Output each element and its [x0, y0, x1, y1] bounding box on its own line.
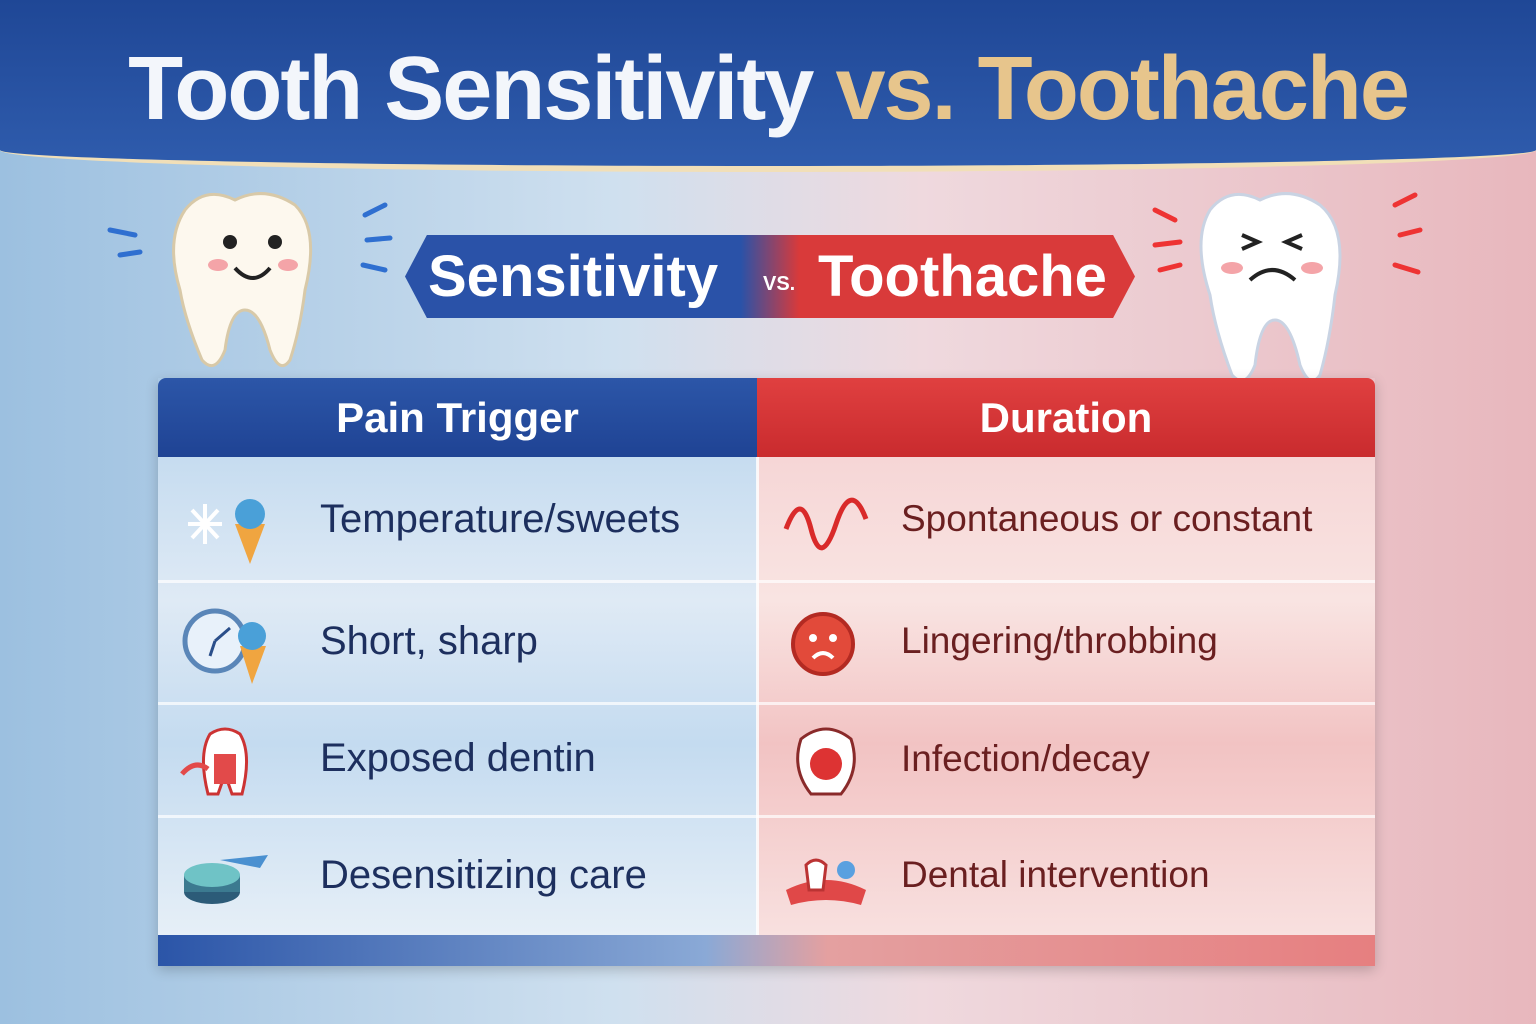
- row: lingering/throbbing: Lingering/throbbing: [901, 620, 1218, 661]
- row: short, sharp: [182, 608, 538, 684]
- row: desensitizing care: Desensitizing care: [320, 852, 647, 896]
- row: desensitizing care: [184, 852, 647, 904]
- row: infection/decay: [796, 728, 1150, 796]
- header: duration: Duration: [980, 394, 1152, 440]
- row: temperature/sweets: Temperature/sweets: [320, 496, 680, 540]
- row: lingering/throbbing: [791, 612, 1218, 676]
- icon: sad tooth: [1152, 192, 1422, 378]
- row: short, sharp: Short, sharp: [320, 618, 538, 662]
- row: dental intervention: [786, 854, 1210, 905]
- row: infection/decay: Infection/decay: [901, 738, 1150, 778]
- title: Tooth Sensitivity vs. Toothache: [128, 39, 1408, 139]
- header: duration: [757, 378, 1375, 457]
- table: [158, 378, 1375, 966]
- header: pain trigger: Pain Trigger: [336, 394, 579, 440]
- header banner: [0, 0, 1536, 172]
- ribbon: sensitivity vs toothache: Sensitivity: [428, 244, 718, 309]
- row: exposed dentin: Exposed dentin: [320, 736, 596, 780]
- header: pain trigger: [158, 378, 757, 457]
- row: spontaneous or constant: [784, 498, 1312, 550]
- ribbon: sensitivity vs toothache: Toothache: [818, 244, 1107, 309]
- row: exposed dentin: [180, 728, 596, 796]
- icon: happy tooth: [108, 192, 392, 368]
- row: dental intervention: Dental intervention: [901, 854, 1210, 895]
- ribbon: sensitivity vs toothache: [405, 235, 1135, 318]
- row: temperature/sweets: [188, 496, 680, 564]
- ribbon: sensitivity vs toothache: VS.: [763, 273, 795, 295]
- row: spontaneous or constant: Spontaneous or constant: [901, 498, 1312, 539]
